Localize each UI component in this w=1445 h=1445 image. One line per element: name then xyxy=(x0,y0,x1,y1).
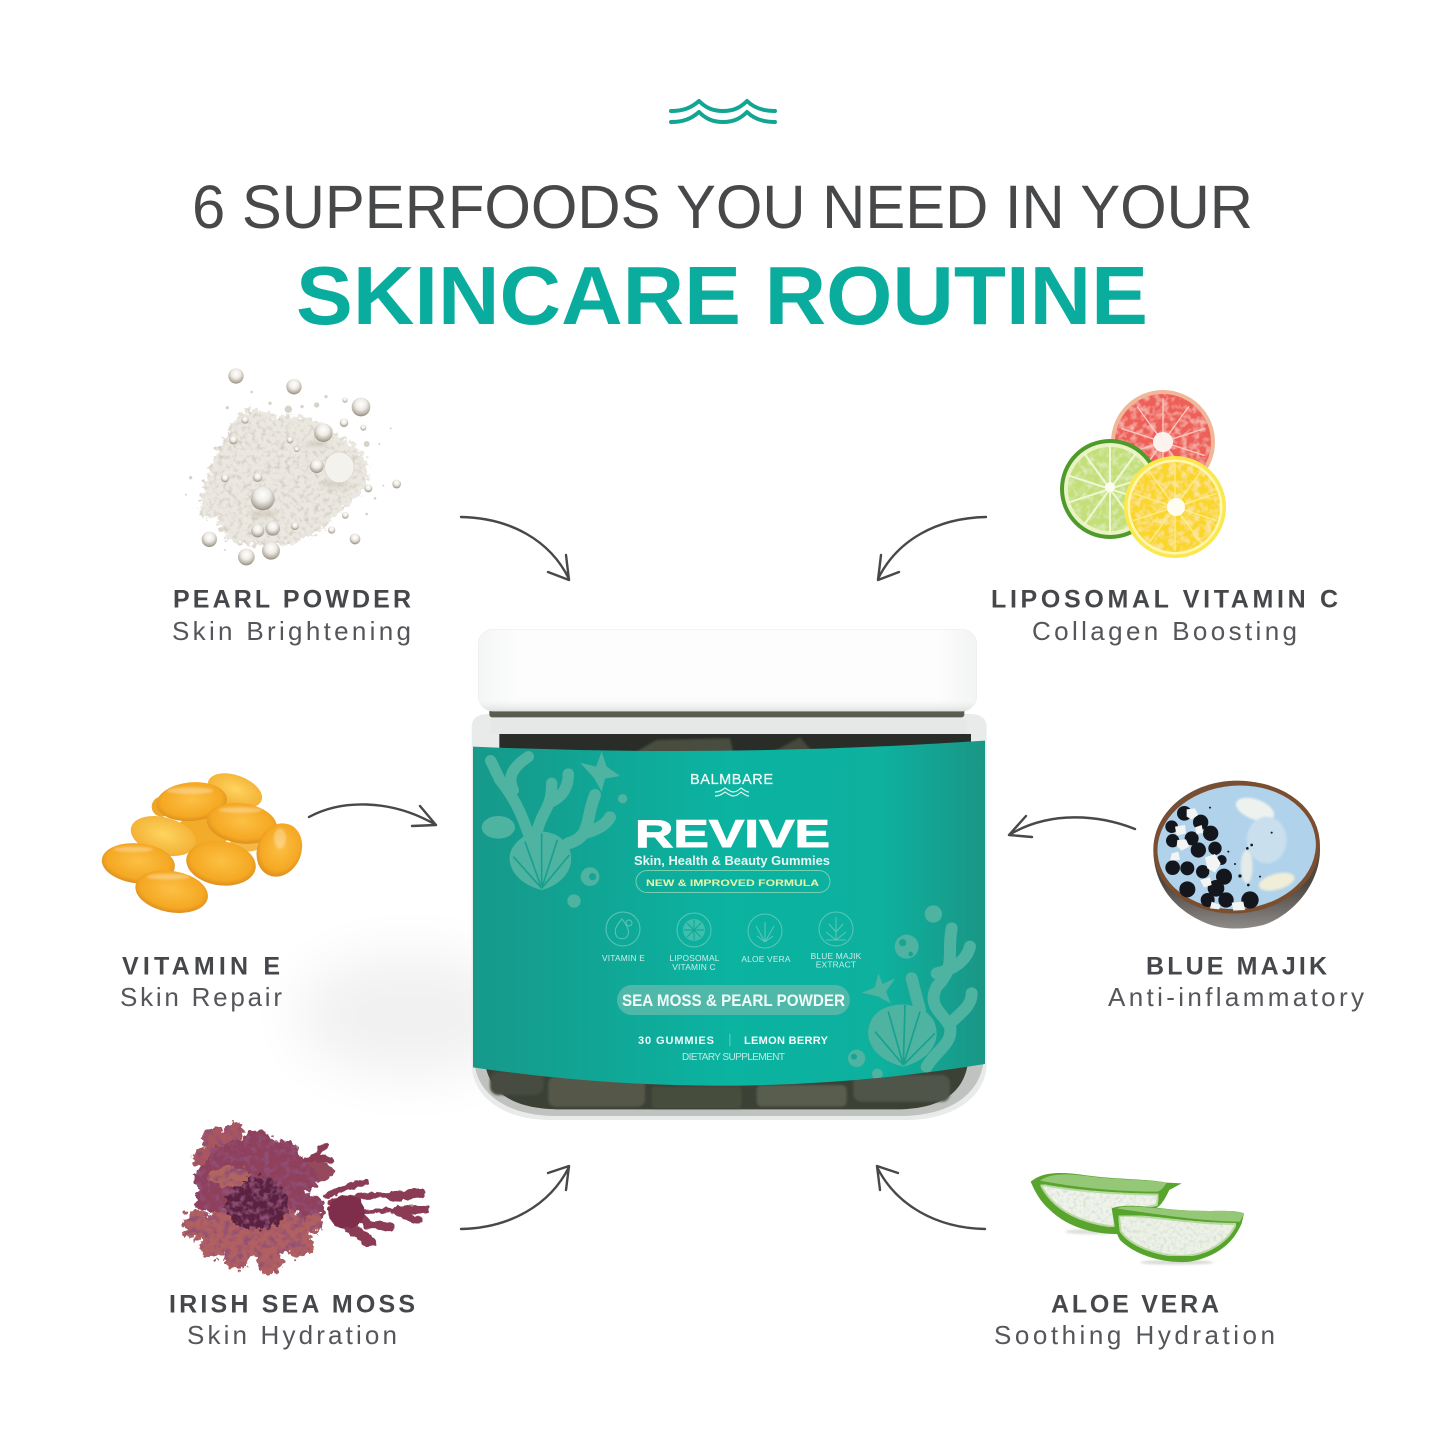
image: aloe vera slices xyxy=(1031,1173,1244,1265)
label ingredient names: EXTRACT xyxy=(816,960,856,970)
label text: dietary supplement: DIETARY SUPPLEMENT xyxy=(682,1052,785,1063)
ingredient: aloe vera xyxy=(994,1173,1275,1350)
image: sea moss xyxy=(183,1123,425,1274)
title line 1: 6 SUPERFOODS YOU NEED IN YOUR xyxy=(192,173,1253,241)
arrow: vitamin e to jar xyxy=(309,804,436,826)
label text: subtitle: Skin, Health & Beauty Gummies xyxy=(634,854,830,868)
ingredient: pearl powder xyxy=(172,368,411,646)
image: citrus slices xyxy=(1060,390,1226,558)
label xyxy=(473,741,985,1086)
label badge: formula: NEW & IMPROVED FORMULA xyxy=(646,878,819,889)
label pill: sea moss and pearl powder xyxy=(617,985,850,1015)
jar neck xyxy=(489,706,964,717)
label text: count and flavor: 30 GUMMIES xyxy=(638,1035,714,1047)
ingredient name: LIPOSOMAL VITAMIN C xyxy=(991,586,1338,614)
label ingredient names xyxy=(602,951,862,972)
jar glass body xyxy=(472,714,987,1120)
label icon: brand waves xyxy=(715,788,749,796)
label ingredient names: BLUE MAJIK xyxy=(811,951,862,961)
lemon xyxy=(1124,456,1226,558)
grapefruit xyxy=(1111,390,1215,494)
ingredient: irish sea moss xyxy=(169,1123,425,1350)
label text: brand: BALMBARE xyxy=(690,772,773,788)
arrow: pearl powder to jar xyxy=(461,517,569,580)
label text: product name: REVIVE xyxy=(635,813,830,856)
ingredient name: IRISH SEA MOSS xyxy=(169,1290,415,1318)
arrow: aloe vera to jar xyxy=(877,1166,985,1229)
gummies at bottom xyxy=(485,1060,968,1109)
arrow: blue majik to jar xyxy=(1009,816,1135,837)
image: softgel capsules xyxy=(100,767,310,918)
label ingredient names: VITAMIN E xyxy=(602,953,645,963)
jar lid xyxy=(478,629,977,711)
arrow: sea moss to jar xyxy=(461,1166,569,1229)
icon: waves xyxy=(671,101,775,122)
label ingredient names: VITAMIN C xyxy=(672,962,716,972)
ingredient benefit: Soothing Hydration xyxy=(994,1320,1275,1350)
label ingredient names: LIPOSOMAL xyxy=(669,953,720,963)
ingredient: blue majik xyxy=(1108,774,1364,1012)
image: blue smoothie bowl xyxy=(1148,774,1325,929)
bottom glass rim xyxy=(475,1060,983,1116)
label ingredient icons xyxy=(606,912,853,948)
ingredient benefit: Skin Hydration xyxy=(187,1320,397,1350)
ingredient: liposomal vitamin c xyxy=(991,390,1338,646)
title line 2: SKINCARE ROUTINE xyxy=(296,249,1148,342)
label decoration: coral and shell bottom right xyxy=(848,905,972,1079)
lime xyxy=(1060,439,1160,539)
ingredient benefit: Skin Repair xyxy=(120,982,282,1012)
ingredient name: BLUE MAJIK xyxy=(1146,952,1327,980)
ingredient name: PEARL POWDER xyxy=(173,586,411,614)
jar shadow xyxy=(295,953,525,1077)
ingredient benefit: Collagen Boosting xyxy=(1032,616,1297,646)
ingredient: vitamin e xyxy=(100,767,310,1012)
ingredient benefit: Skin Brightening xyxy=(172,616,411,646)
gummies at top xyxy=(490,719,971,759)
ingredient benefit: Anti-inflammatory xyxy=(1108,982,1364,1012)
arrow: vitamin c to jar xyxy=(878,517,986,580)
label text: count and flavor: LEMON BERRY xyxy=(744,1035,829,1047)
ingredient name: ALOE VERA xyxy=(1051,1290,1219,1318)
image: pearl powder xyxy=(185,368,401,565)
label text: count and flavor xyxy=(638,1034,829,1047)
label decoration: coral and shell top left xyxy=(482,752,627,908)
ingredient name: VITAMIN E xyxy=(122,952,280,980)
label ingredient names: ALOE VERA xyxy=(741,954,791,964)
label pill: sea moss and pearl powder: SEA MOSS & PEARL POWDER xyxy=(622,991,845,1010)
label badge: formula xyxy=(636,870,830,892)
image: product jar xyxy=(472,629,987,1120)
